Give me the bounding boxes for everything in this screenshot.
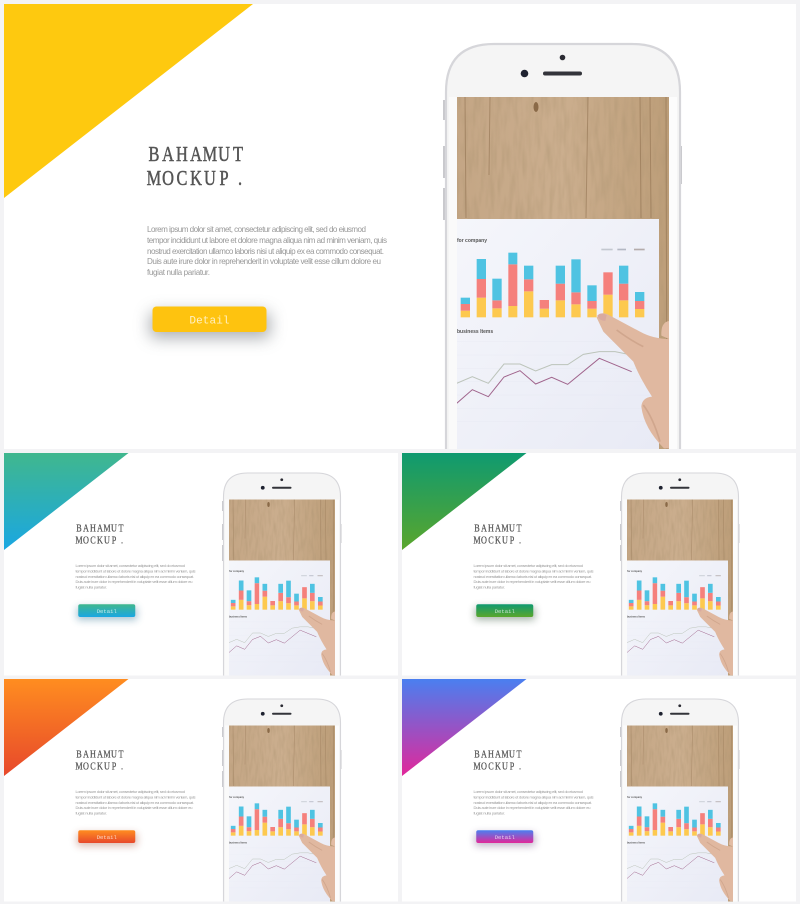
body text: tempor incididunt ut labore et dolore magna aliqua nim ad minim veniam, quis	[474, 568, 594, 574]
body text: nostrud exercitation ullamco laboris nisi ut aliquip ex ea commodo consequat.	[147, 247, 384, 256]
panel: main yellow slide	[4, 4, 796, 470]
heading: BAHAMUT	[76, 750, 124, 761]
panel: orange slide	[4, 679, 398, 904]
body text	[474, 563, 594, 590]
body text	[76, 789, 196, 816]
body text: fugiat nulla pariatur.	[76, 584, 107, 590]
body text	[474, 789, 594, 816]
phone mockup with chart photo: for company	[229, 796, 245, 799]
button: detail: Detail	[97, 608, 117, 615]
phone mockup with chart photo	[620, 699, 740, 904]
gradient corner triangle	[4, 453, 128, 550]
body text: Lorem ipsum dolor sit amet, consectetur adipiscing elit, sed do eiusmod	[474, 563, 583, 568]
body text: Lorem ipsum dolor sit amet, consectetur adipiscing elit, sed do eiusmod	[474, 789, 583, 794]
button: detail: Detail	[495, 608, 515, 615]
button: detail: Detail	[189, 316, 230, 328]
body text: fugiat nulla pariatur.	[76, 810, 107, 816]
panel: green slide	[402, 453, 796, 686]
button: detail	[77, 830, 137, 846]
heading: BAHAMUT	[474, 524, 522, 535]
heading: MOCKUP.	[75, 762, 123, 773]
heading	[147, 143, 243, 191]
body text: Duis aute irure dolor in reprehenderit in voluptate velit esse cillum dolore eu	[76, 579, 193, 584]
heading: MOCKUP.	[473, 762, 521, 773]
panel: teal-blue slide	[4, 453, 398, 686]
phone mockup with chart photo	[620, 473, 740, 686]
phone mockup with chart photo: for company	[627, 570, 643, 573]
gradient corner triangle	[402, 679, 526, 776]
phone mockup with chart photo: for company	[229, 570, 245, 573]
body text: tempor incididunt ut labore et dolore magna aliqua nim ad minim veniam, quis	[147, 236, 387, 245]
phone mockup with chart photo: business Items	[229, 616, 248, 618]
heading: MOCKUP.	[75, 536, 123, 547]
body text: fugiat nulla pariatur.	[147, 268, 210, 277]
body text: Lorem ipsum dolor sit amet, consectetur adipiscing elit, sed do eiusmod	[147, 225, 366, 234]
button: detail	[475, 604, 535, 620]
body text: fugiat nulla pariatur.	[474, 584, 505, 590]
body text: Duis aute irure dolor in reprehenderit in voluptate velit esse cillum dolore eu	[474, 579, 591, 584]
panel: blue-magenta slide	[402, 679, 796, 904]
heading: BAHAMUT	[149, 143, 243, 167]
phone mockup with chart photo	[443, 44, 682, 470]
heading: MOCKUP.	[147, 167, 242, 191]
phone mockup with chart photo	[222, 473, 342, 686]
body text	[147, 225, 387, 277]
button: detail: Detail	[97, 834, 117, 841]
phone mockup with chart photo	[222, 699, 342, 904]
phone mockup with chart photo: for company	[457, 238, 487, 244]
body text: Duis aute irure dolor in reprehenderit in voluptate velit esse cillum dolore eu	[76, 805, 193, 810]
phone mockup with chart photo: business Items	[229, 842, 248, 844]
yellow corner triangle	[4, 4, 253, 198]
button: detail: Detail	[495, 834, 515, 841]
body text: tempor incididunt ut labore et dolore magna aliqua nim ad minim veniam, quis	[76, 568, 196, 574]
body text: nostrud exercitation ullamco laboris nisi ut aliquip ex ea commodo consequat.	[474, 574, 592, 579]
body text: Lorem ipsum dolor sit amet, consectetur adipiscing elit, sed do eiusmod	[76, 789, 185, 794]
heading: MOCKUP.	[473, 536, 521, 547]
body text: Lorem ipsum dolor sit amet, consectetur adipiscing elit, sed do eiusmod	[76, 563, 185, 568]
button: detail	[150, 306, 270, 338]
body text: nostrud exercitation ullamco laboris nisi ut aliquip ex ea commodo consequat.	[474, 800, 592, 805]
body text: nostrud exercitation ullamco laboris nisi ut aliquip ex ea commodo consequat.	[76, 574, 194, 579]
phone mockup with chart photo: business Items	[627, 616, 646, 618]
phone mockup with chart photo: business Items	[627, 842, 646, 844]
body text: tempor incididunt ut labore et dolore magna aliqua nim ad minim veniam, quis	[474, 794, 594, 800]
phone mockup with chart photo: business Items	[457, 329, 493, 335]
heading: BAHAMUT	[474, 750, 522, 761]
phone mockup with chart photo: for company	[627, 796, 643, 799]
body text: tempor incididunt ut labore et dolore magna aliqua nim ad minim veniam, quis	[76, 794, 196, 800]
body text: fugiat nulla pariatur.	[474, 810, 505, 816]
heading	[75, 750, 124, 773]
button: detail	[77, 604, 137, 620]
body text: Duis aute irure dolor in reprehenderit in voluptate velit esse cillum dolore eu	[147, 257, 381, 266]
heading	[473, 750, 522, 773]
body text: nostrud exercitation ullamco laboris nisi ut aliquip ex ea commodo consequat.	[76, 800, 194, 805]
heading	[473, 524, 522, 547]
heading: BAHAMUT	[76, 524, 124, 535]
gradient corner triangle	[4, 679, 128, 776]
body text	[76, 563, 196, 590]
heading	[75, 524, 124, 547]
body text: Duis aute irure dolor in reprehenderit in voluptate velit esse cillum dolore eu	[474, 805, 591, 810]
button: detail	[475, 830, 535, 846]
gradient corner triangle	[402, 453, 526, 550]
